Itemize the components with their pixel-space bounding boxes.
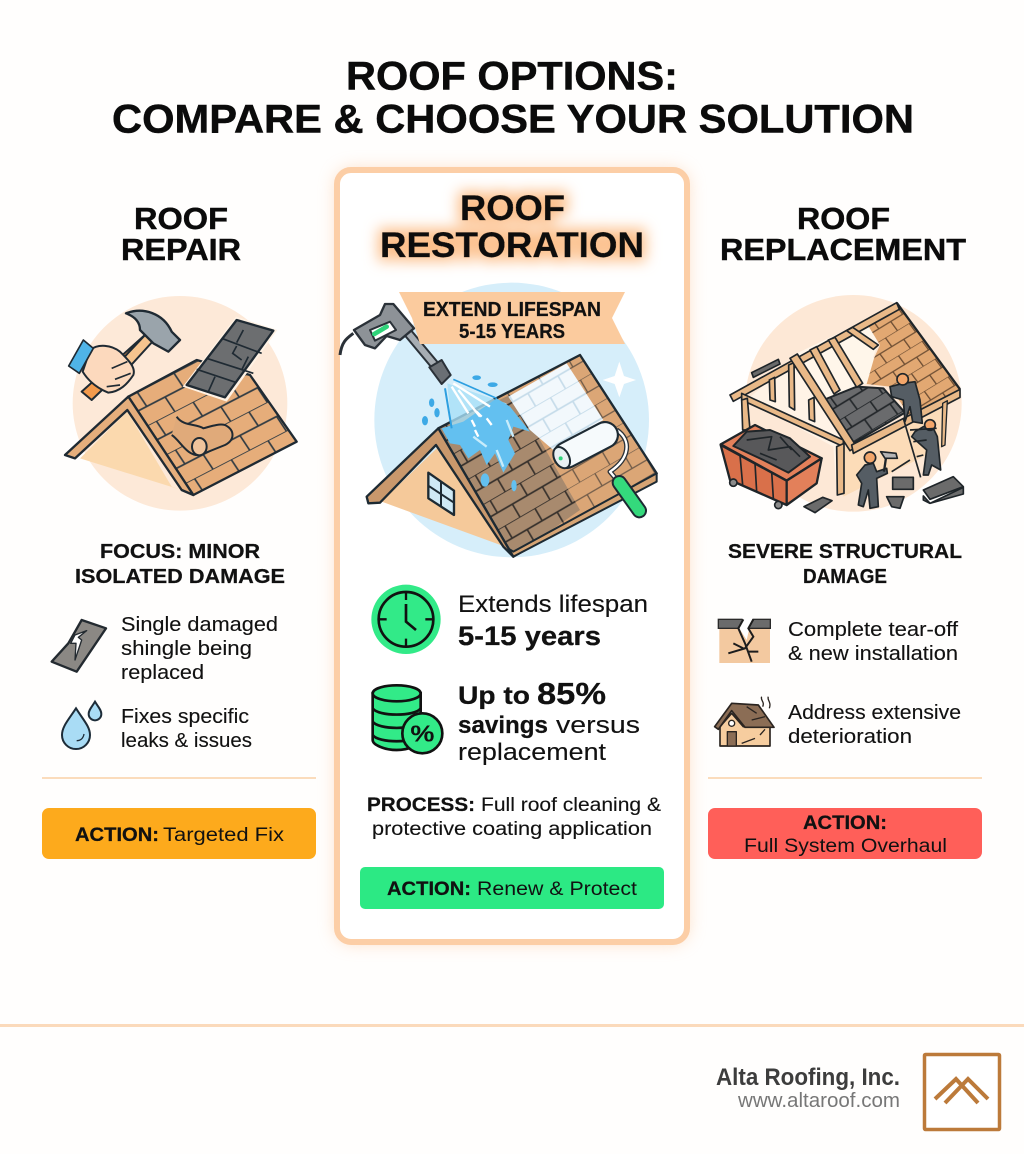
- heading: roof replacement: [720, 201, 966, 267]
- text: single damaged shingle: replaced: [121, 662, 204, 684]
- text: fixes leaks: Fixes specific: [121, 706, 249, 728]
- company name: [716, 1064, 900, 1112]
- text: savings: replacement: [458, 739, 606, 766]
- heading: roof restoration: RESTORATION: [380, 226, 644, 265]
- text: savings: [458, 676, 640, 766]
- card: [337, 170, 687, 942]
- severe damage text: [728, 541, 962, 588]
- icon: cracked wall: [718, 618, 770, 663]
- text: savings: versus: [556, 712, 640, 739]
- banner: extend lifespan: 5-15 YEARS: [459, 321, 565, 343]
- severe damage text: SEVERE STRUCTURAL: [728, 541, 962, 563]
- sparkle: [603, 362, 636, 397]
- action button: targeted fix: Targeted Fix: [163, 825, 285, 846]
- title: ROOF OPTIONS:: [346, 54, 678, 98]
- text: extends lifespan: Extends lifespan: [458, 591, 648, 618]
- illustration: hammer and damaged roof: [65, 296, 297, 511]
- panel: roof replacement: [708, 201, 982, 859]
- text: single damaged shingle: Single damaged: [121, 614, 278, 636]
- footer: [0, 1024, 1024, 1130]
- text: process: PROCESS:: [367, 795, 475, 816]
- action button: renew and protect: ACTION:: [387, 879, 471, 900]
- action button: targeted fix: ACTION:: [75, 825, 159, 846]
- company name: www.altaroof.com: [737, 1090, 900, 1112]
- focus text: ISOLATED DAMAGE: [75, 566, 285, 588]
- heading: roof repair: ROOF: [134, 201, 228, 236]
- icon: water drops: [62, 702, 101, 749]
- icon: damaged shingle: [52, 620, 106, 672]
- text: process: Full roof cleaning &: [481, 795, 661, 816]
- text: extensive deterioration: [788, 702, 961, 748]
- text: complete tear-off: [788, 619, 958, 665]
- illustration: pressure washer and coating roller: [340, 283, 657, 557]
- text: extends lifespan: [458, 591, 648, 651]
- text: single damaged shingle: shingle being: [121, 638, 252, 660]
- action button: renew and protect: Renew & Protect: [477, 879, 638, 900]
- focus text: [75, 541, 285, 588]
- workers: [804, 374, 963, 513]
- title: COMPARE & CHOOSE YOUR SOLUTION: [112, 98, 914, 142]
- action button: full system overhaul: ACTION:: [803, 813, 887, 834]
- logo: [924, 1054, 1000, 1130]
- title: [112, 54, 914, 142]
- text: complete tear-off: Complete tear-off: [788, 619, 958, 641]
- pressure washer gun: [340, 304, 451, 384]
- heading: roof restoration: ROOF: [460, 189, 565, 228]
- company name: Alta Roofing, Inc.: [716, 1064, 900, 1091]
- action button: targeted fix: [42, 808, 316, 859]
- icon: coin stack with percent: %: [410, 720, 435, 746]
- icon: coin stack with percent: [373, 685, 442, 753]
- icon: clock: [371, 585, 441, 654]
- text: process: [367, 795, 661, 840]
- illustration: roof tear-off and workers: [721, 295, 963, 513]
- text: process: protective coating application: [372, 819, 652, 840]
- dumpster: [721, 425, 822, 509]
- water spray: [422, 375, 530, 491]
- action button: renew and protect: [360, 867, 664, 909]
- heading: roof replacement: ROOF: [797, 201, 890, 236]
- focus text: FOCUS: MINOR: [100, 541, 261, 563]
- text: fixes leaks: [121, 706, 252, 752]
- heading: roof replacement: REPLACEMENT: [720, 232, 966, 267]
- banner: extend lifespan: [399, 292, 625, 344]
- text: savings: 85%: [537, 676, 606, 711]
- action button: full system overhaul: Full System Overhaul: [744, 836, 947, 857]
- action button: full system overhaul: [708, 808, 982, 859]
- paint roller: [550, 430, 639, 511]
- heading: roof repair: REPAIR: [121, 232, 241, 267]
- panel: roof repair: [42, 201, 316, 859]
- text: extensive deterioration: Address extensive: [788, 702, 961, 724]
- heading: roof repair: [121, 201, 241, 267]
- icon: deteriorated house: [715, 697, 774, 746]
- text: savings: savings: [458, 712, 548, 739]
- text: extends lifespan: 5-15 years: [458, 621, 601, 651]
- text: single damaged shingle: [121, 614, 278, 684]
- heading: roof restoration: [380, 189, 644, 265]
- severe damage text: DAMAGE: [803, 566, 887, 588]
- text: complete tear-off: & new installation: [788, 643, 958, 665]
- text: fixes leaks: leaks & issues: [121, 730, 252, 752]
- text: savings: Up to: [458, 682, 530, 710]
- panel: roof restoration: [337, 170, 687, 942]
- banner: extend lifespan: EXTEND LIFESPAN: [423, 299, 601, 321]
- text: extensive deterioration: deterioration: [788, 726, 912, 748]
